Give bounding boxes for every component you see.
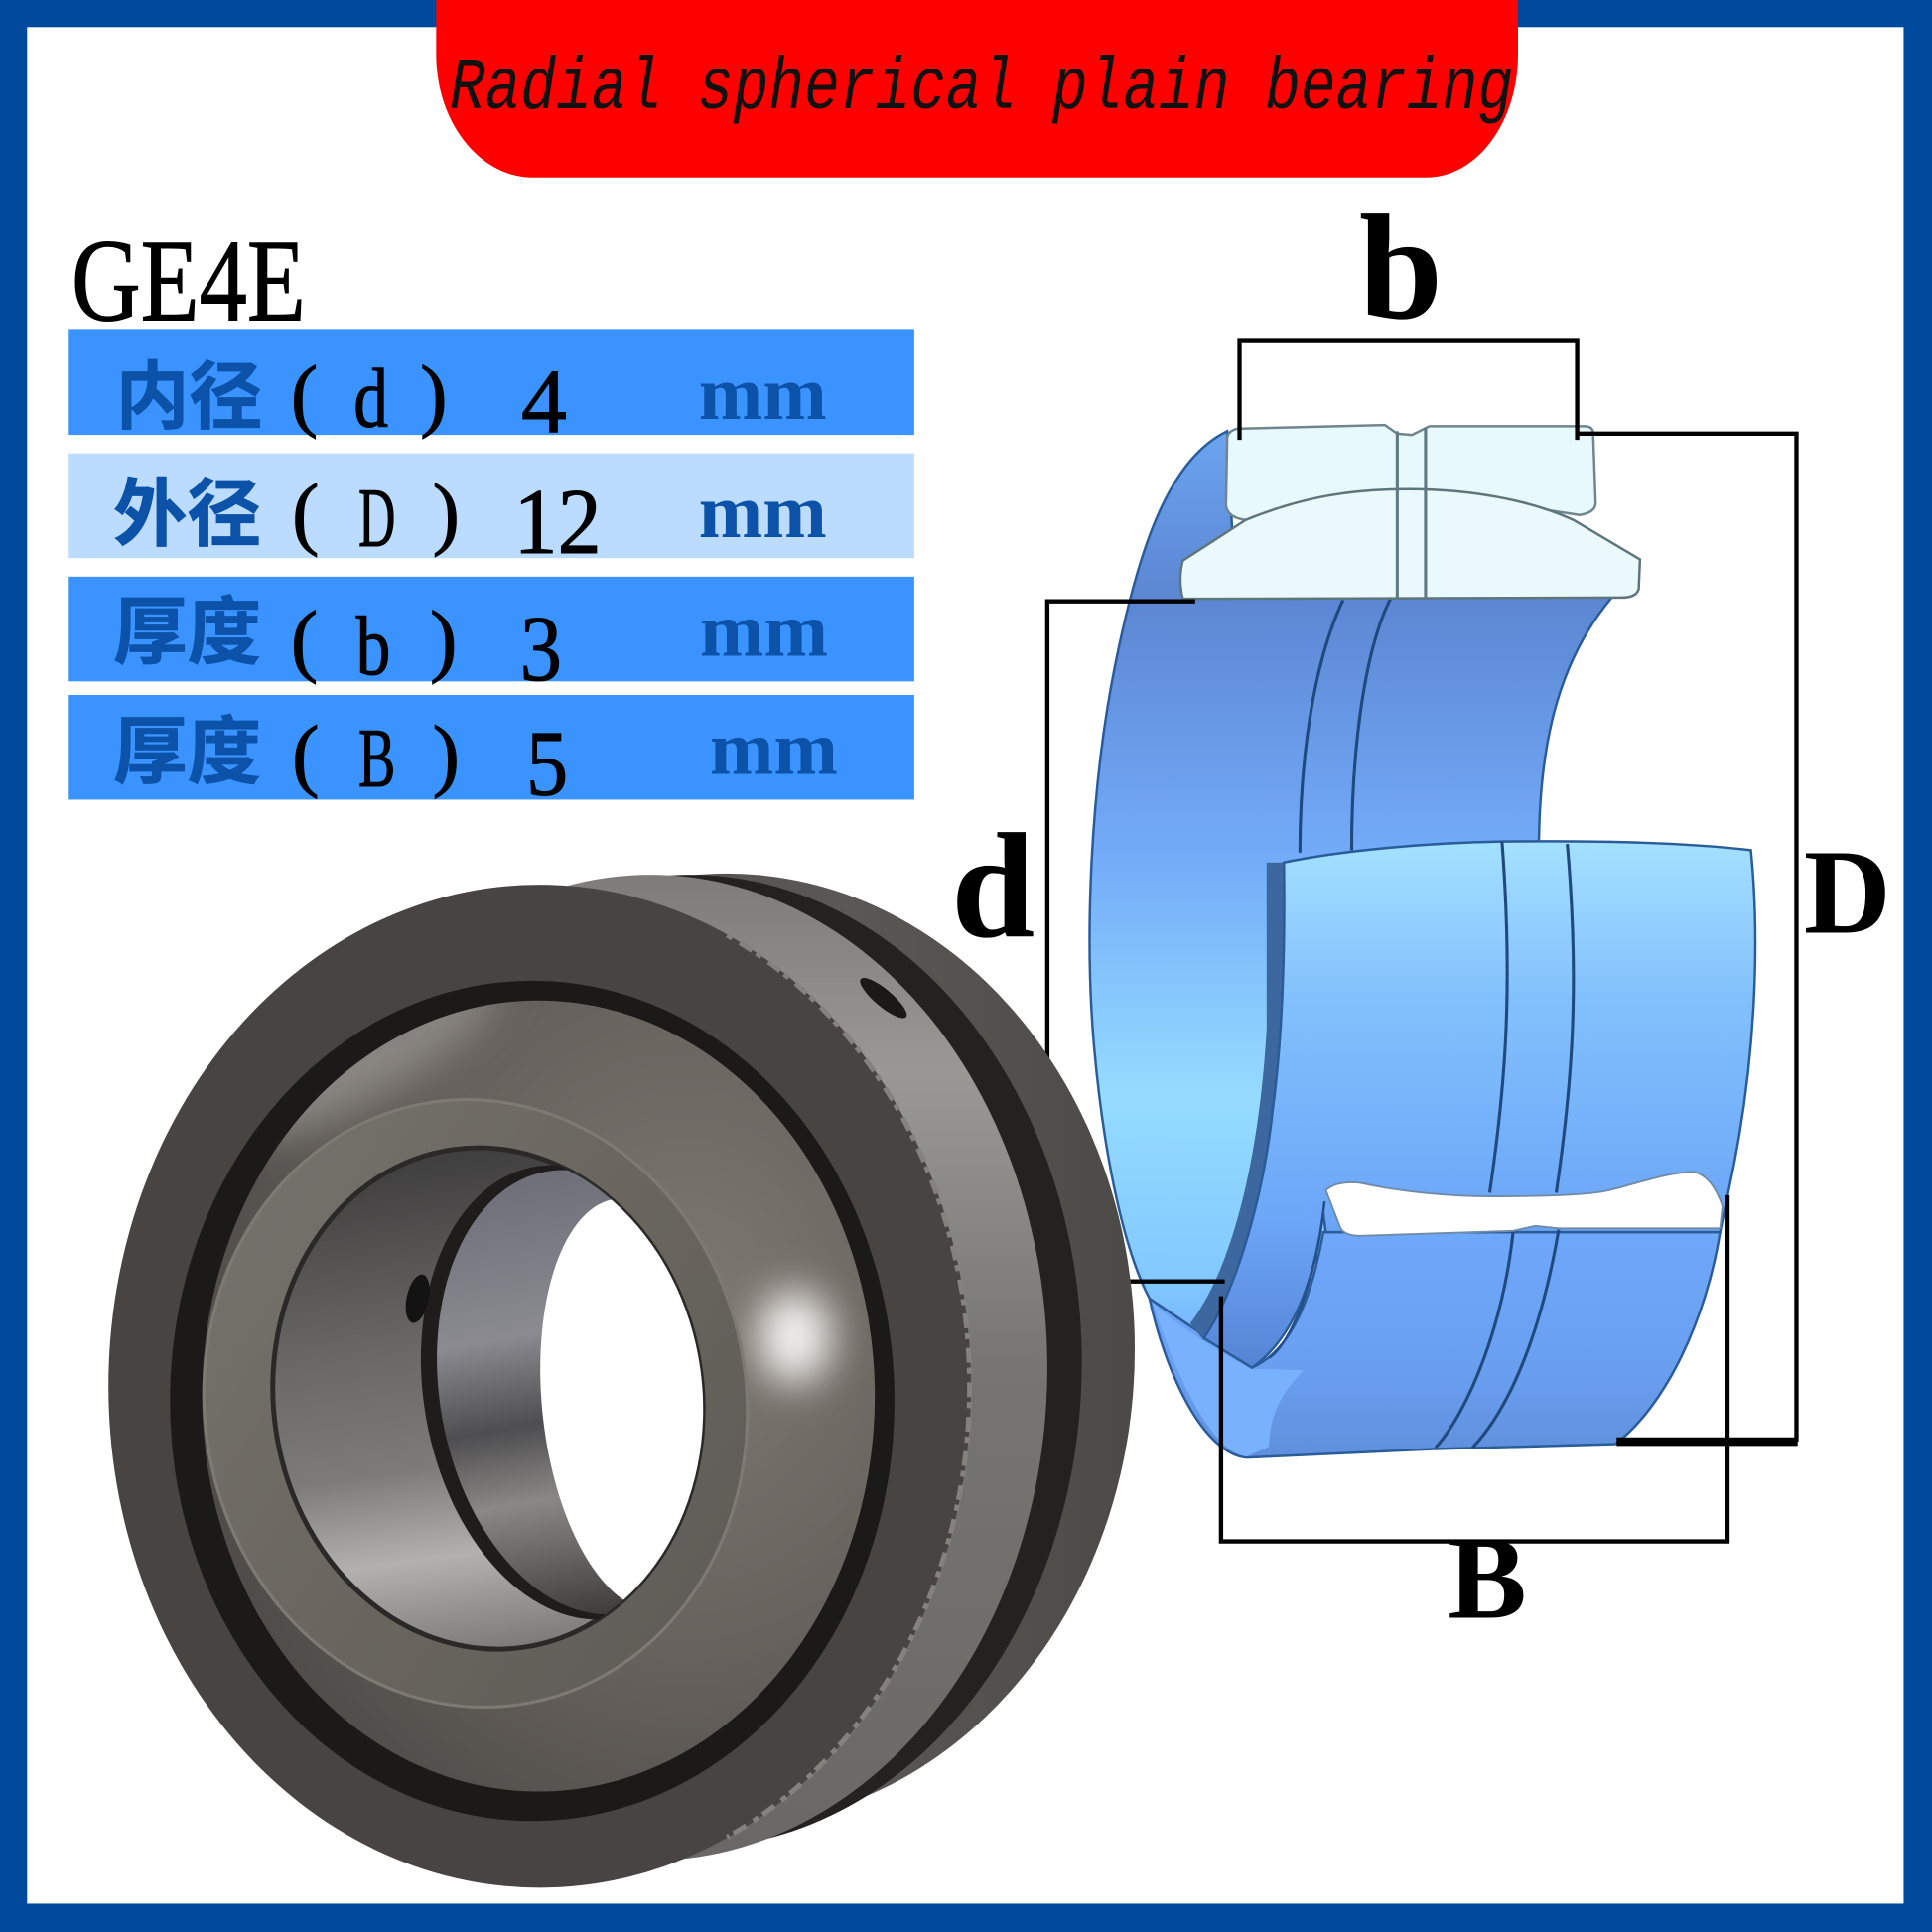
bright middle band [254, 875, 1047, 1861]
lower body of ring [1150, 1232, 1721, 1457]
ball highlights [223, 954, 832, 1384]
oil hole on outer ring [855, 972, 911, 1024]
white slot section [1325, 1172, 1723, 1236]
row: outer diameter: D [358, 473, 395, 565]
dark inner edge of front half [1190, 863, 1287, 1340]
row: thickness b: 3 [520, 598, 562, 701]
row: inner diameter: ( [291, 348, 318, 439]
title banner: Radial spherical plain bearing [450, 48, 1513, 131]
row: thickness B: ) [433, 709, 460, 799]
row: outer diameter: 外径 [113, 474, 261, 556]
worn outer edge of face [727, 935, 970, 1837]
row: thickness B: ( [292, 709, 319, 799]
spherical ball [203, 1001, 875, 1792]
label d: d [951, 802, 1035, 969]
lubrication hole in bore [402, 1272, 434, 1325]
label D: D [1804, 826, 1891, 959]
row: outer diameter: 12 [514, 471, 602, 574]
rear body [319, 874, 1135, 1825]
row: inner diameter: mm [699, 350, 827, 436]
row: thickness B: 厚度 [113, 711, 261, 793]
row: thickness b [68, 577, 914, 701]
row: thickness b: mm [700, 587, 828, 672]
dimension b bracket [1240, 341, 1578, 440]
section groove lines [1397, 428, 1426, 598]
row: thickness b: 厚度 [113, 592, 261, 674]
row: thickness B: 5 [526, 712, 568, 815]
dimension B bracket [1221, 1195, 1727, 1542]
row: outer diameter: ) [433, 468, 460, 558]
row: thickness B [68, 695, 914, 815]
row: outer diameter: mm [699, 469, 827, 554]
label b: b [1359, 184, 1443, 350]
row: thickness B: mm [710, 705, 838, 790]
row: inner diameter: 4 [521, 351, 567, 453]
bearing cross-section diagram [951, 184, 1891, 1644]
row: inner diameter: 内径 [116, 356, 262, 439]
row: inner diameter: d [353, 352, 388, 445]
bore interior and opening [421, 1166, 703, 1620]
dark recess [170, 981, 895, 1821]
sweep edge below slot [1269, 1201, 1324, 1358]
row: thickness b: ) [430, 594, 457, 684]
front groove lines [1436, 842, 1574, 1448]
row: inner diameter: ) [420, 348, 447, 439]
title banner [436, 0, 1518, 178]
front face ring [108, 885, 971, 1887]
outer race section, top [1226, 425, 1595, 520]
dimension D bracket [1578, 434, 1798, 1442]
bore [240, 1120, 736, 1677]
pale lower lip [1154, 1304, 1304, 1456]
inner lip [165, 1064, 786, 1742]
bearing product photo [108, 874, 1135, 1887]
row: inner diameter [68, 329, 914, 453]
row: thickness B: B [358, 713, 395, 805]
rear groove [298, 875, 1082, 1849]
label B: B [1448, 1513, 1527, 1644]
row: outer diameter: ( [292, 468, 319, 558]
inner race section, top [1180, 489, 1640, 599]
dimension d bracket [1047, 602, 1225, 1282]
upper groove lines [1300, 595, 1392, 853]
row: thickness b: ( [291, 594, 318, 684]
row: outer diameter [68, 454, 914, 574]
spec table [68, 329, 914, 815]
rear ring body [1090, 431, 1611, 1368]
row: thickness b: b [356, 601, 390, 693]
front half body [1204, 841, 1755, 1368]
model number: GE4E [71, 215, 306, 346]
